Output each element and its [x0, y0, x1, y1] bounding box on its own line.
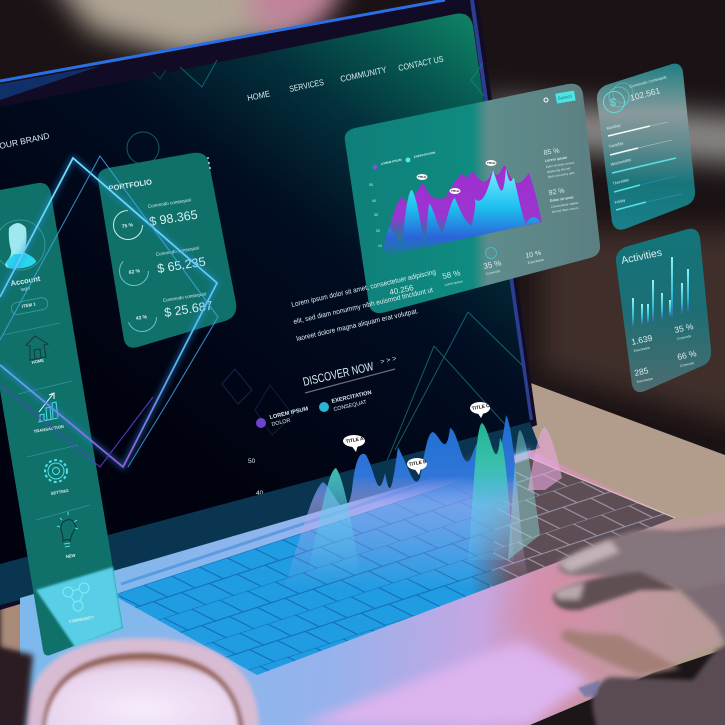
coffee cup: [25, 638, 259, 725]
mini title tags: [416, 160, 496, 194]
stat right column: 92 %: [548, 188, 565, 197]
panel: sidebar: SETTING: [50, 488, 69, 496]
neon diamonds: [0, 156, 218, 467]
panel: sidebar: TRANSACTION: [33, 424, 64, 434]
stat right column: 85 %: [543, 148, 560, 157]
stat right column: Lorem ipsum: [545, 156, 567, 163]
screen: [0, 14, 530, 564]
table surface, right: [528, 382, 725, 725]
item pill: ITEM 1: [21, 301, 37, 309]
upper finger: [558, 528, 725, 590]
paragraph text: Lorem ipsum dolor sit amet, consectetuer adipiscing: [291, 269, 437, 309]
icon: gear: [45, 460, 67, 482]
portfolio row 3: 43 %: [135, 314, 148, 322]
icon: dollar coins: [604, 83, 633, 112]
stat row: Exercitation: [527, 258, 545, 265]
stat row: 58 %: [442, 268, 461, 281]
stat right column: diam nonummy nibh: [548, 171, 575, 179]
chart legend: LOREM IPSUM: [380, 158, 402, 166]
stat right column: Consectetuer adipisc: [551, 201, 579, 209]
axis numbers: 10: [274, 583, 282, 590]
activity stats: [630, 321, 698, 384]
panel: portfolio: [98, 153, 236, 348]
portfolio row 2: $ 65.235: [156, 255, 207, 276]
icon: transaction: [38, 393, 58, 422]
day rows: [606, 122, 682, 210]
portfolio row 1: $ 98.365: [148, 208, 199, 229]
back of hand: [640, 525, 725, 665]
stat row: Commodo: [485, 269, 501, 276]
panel: activities: [616, 229, 711, 392]
nav labels: [246, 54, 445, 103]
portfolio row 2: Commodo consequat: [155, 245, 200, 257]
stat row: [389, 248, 545, 297]
mini title tags: TITLE: [418, 175, 426, 179]
axis numbers: 20: [268, 551, 276, 558]
portfolio row 3: $ 25.687: [163, 299, 214, 320]
bottom area chart: [283, 415, 562, 590]
title tags: [343, 402, 491, 475]
title tags: TITLE B: [408, 459, 428, 468]
paragraph text: elit, sed diam nonummy nibh euismod tincidunt ut: [293, 287, 434, 326]
area chart front: [383, 168, 540, 255]
panel: daily progress: [597, 64, 695, 230]
icon: home: [26, 336, 48, 360]
activity stats: 285: [633, 365, 650, 378]
axis numbers: 40: [256, 490, 264, 497]
mini axis: 30: [374, 213, 378, 217]
screen wireframe shapes: [127, 60, 522, 478]
portfolio row 2: [120, 245, 207, 286]
mini axis: 10: [378, 244, 382, 248]
discover now: > > >: [380, 355, 397, 366]
portfolio row 2: 62 %: [128, 268, 141, 276]
activity stats: 66 %: [676, 348, 698, 362]
panel: sidebar: [0, 183, 123, 655]
activity stats: Commodo: [676, 334, 692, 341]
panel: activities: Activities: [620, 247, 663, 267]
legend: CONSEQUAT: [333, 399, 368, 413]
laptop lid: [0, 0, 537, 610]
mini axis: 40: [372, 199, 376, 203]
mini axis: 20: [376, 229, 380, 233]
mini title tags: TITLE: [451, 189, 459, 193]
nav labels: COMMUNITY: [339, 64, 388, 84]
laptop base: [20, 450, 725, 725]
keyboard: [113, 449, 675, 675]
activity stats: Exercitation: [636, 377, 654, 384]
portfolio row 1: 75 %: [121, 222, 134, 230]
legend: EXERCITATION: [331, 390, 372, 405]
legend: DOLOR: [271, 418, 291, 428]
chart legend: [372, 151, 436, 170]
activity stats: 35 %: [673, 321, 695, 335]
mini axis: 50: [369, 183, 373, 187]
hand: [553, 525, 725, 725]
mini axis: [369, 183, 382, 248]
day rows: Monday: [606, 122, 621, 131]
bar chart: [632, 257, 689, 326]
thumb: [592, 640, 725, 725]
hinge strip: [0, 422, 540, 605]
panel: sidebar: HOME: [31, 357, 45, 365]
activity stats: Exercitation: [633, 346, 651, 353]
portfolio row 3: Commodo consequat: [162, 291, 207, 303]
mini title tags: TITLE: [487, 161, 495, 165]
day rows: Thursday: [612, 177, 629, 186]
legend: LOREM IPSUM: [269, 406, 309, 421]
item pill: [10, 297, 49, 316]
stat right column: adipiscing elit sed: [547, 166, 571, 174]
portfolio row 3: [128, 291, 214, 332]
activity stats: Commodo: [679, 361, 695, 368]
search: [544, 91, 576, 104]
axis numbers: 50: [248, 458, 256, 465]
trackpad shadow: [562, 630, 680, 675]
lid blue edge: [0, 0, 445, 81]
panel: daily progress: Commodo consequat: [629, 74, 668, 89]
lower finger: [553, 572, 680, 610]
legend: [256, 390, 372, 428]
axis numbers: [248, 458, 282, 590]
nav labels: SERVICES: [288, 77, 325, 94]
search: Search: [557, 93, 573, 101]
icon: dollar coins: $: [610, 97, 616, 109]
stat right column: [543, 148, 579, 214]
activity stats: 1.639: [630, 333, 653, 347]
icon: community: [63, 583, 89, 611]
stat row: 35 %: [483, 258, 502, 271]
account avatar: [0, 220, 45, 270]
panel: sidebar: NEW: [65, 553, 76, 559]
day rows: Friday: [614, 197, 626, 205]
title tags: TITLE A: [345, 436, 365, 445]
paragraph text: laoreet dolore magna aliquam erat volutpat.: [296, 308, 419, 343]
portfolio row 1: [114, 197, 199, 240]
cup shadow left: [0, 645, 33, 725]
title tags: TITLE C: [471, 403, 491, 412]
day rows: Wednesday: [610, 157, 632, 167]
stat right column: elit sed diam nonum: [552, 206, 579, 214]
discover now: DISCOVER NOW: [302, 359, 375, 389]
panel: daily progress: 102.561: [629, 85, 661, 103]
table surface, left: [0, 555, 40, 660]
chart legend: EXERCITATION: [413, 151, 436, 159]
portfolio row 1: Commodo consequat: [147, 197, 192, 209]
front dark edge: [530, 650, 725, 725]
day rows: Tuesday: [608, 140, 624, 149]
panel: chart glass: [345, 84, 600, 313]
panel: sidebar: login: [20, 285, 31, 292]
panel: sidebar: COMMUNITY: [68, 615, 95, 624]
axis numbers: 30: [262, 521, 270, 528]
stat row: 40.256: [389, 283, 415, 297]
stat right column: Dolor sit amet consec: [546, 160, 575, 169]
area chart back: [383, 166, 542, 255]
nav labels: CONTACT US: [397, 54, 445, 73]
stat row: 10 %: [525, 250, 542, 260]
stat right column: Dolor sit amet: [550, 195, 575, 203]
paragraph text: [291, 269, 437, 343]
icon: bulb: [57, 512, 78, 547]
stat row: Lorem ipsum: [444, 279, 464, 287]
base bright light: [300, 450, 600, 725]
panel: portfolio: PORTFOLIO: [108, 177, 153, 193]
panel: sidebar: Account: [10, 274, 41, 288]
nav labels: HOME: [246, 88, 271, 103]
